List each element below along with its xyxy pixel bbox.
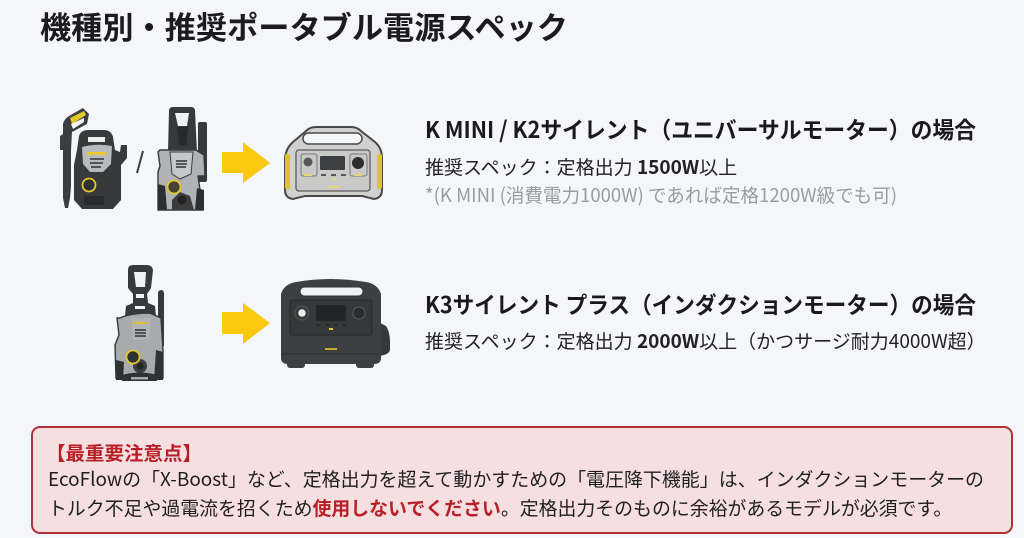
callout line 2: トルク不足や過電流を招くため使用しないでください。定格出力そのものに余裕があるモデルが必須です。: [48, 494, 952, 521]
icon: K2 Silent pressure washer: [158, 107, 207, 210]
heading: K3: K3サイレント プラス（インダクションモーター）の場合: [425, 286, 976, 320]
heading: K MINI / K2: K MINI / K2サイレント（ユニバーサルモーター）の場合: [425, 111, 976, 145]
callout heading: 【最重要注意点】: [46, 439, 202, 466]
spec: K MINI / K2: 推奨スペック：定格出力 1500W以上: [425, 153, 737, 180]
callout line 1: EcoFlowの「X-Boost」など、定格出力を超えて動かすための「電圧降下機能」は、インダクションモーターの: [48, 465, 984, 492]
callout: warning: [32, 427, 1012, 533]
icon: K MINI pressure washer: [60, 108, 127, 209]
icon: K3 Silent Plus pressure washer: [115, 265, 164, 381]
title: 機種別・推奨ポータブル電源スペック: [40, 3, 568, 48]
arrow 2: [222, 303, 270, 344]
note: K MINI: *(K MINI (消費電力1000W) であれば定格1200W級でも可): [425, 181, 897, 208]
icon: black portable power station: [281, 279, 390, 368]
icon: grey portable power station: [285, 127, 382, 199]
slash divider between models: [137, 151, 143, 173]
arrow 1: [222, 142, 270, 183]
spec: K3: 推奨スペック：定格出力 2000W以上（かつサージ耐力4000W超）: [425, 327, 986, 354]
